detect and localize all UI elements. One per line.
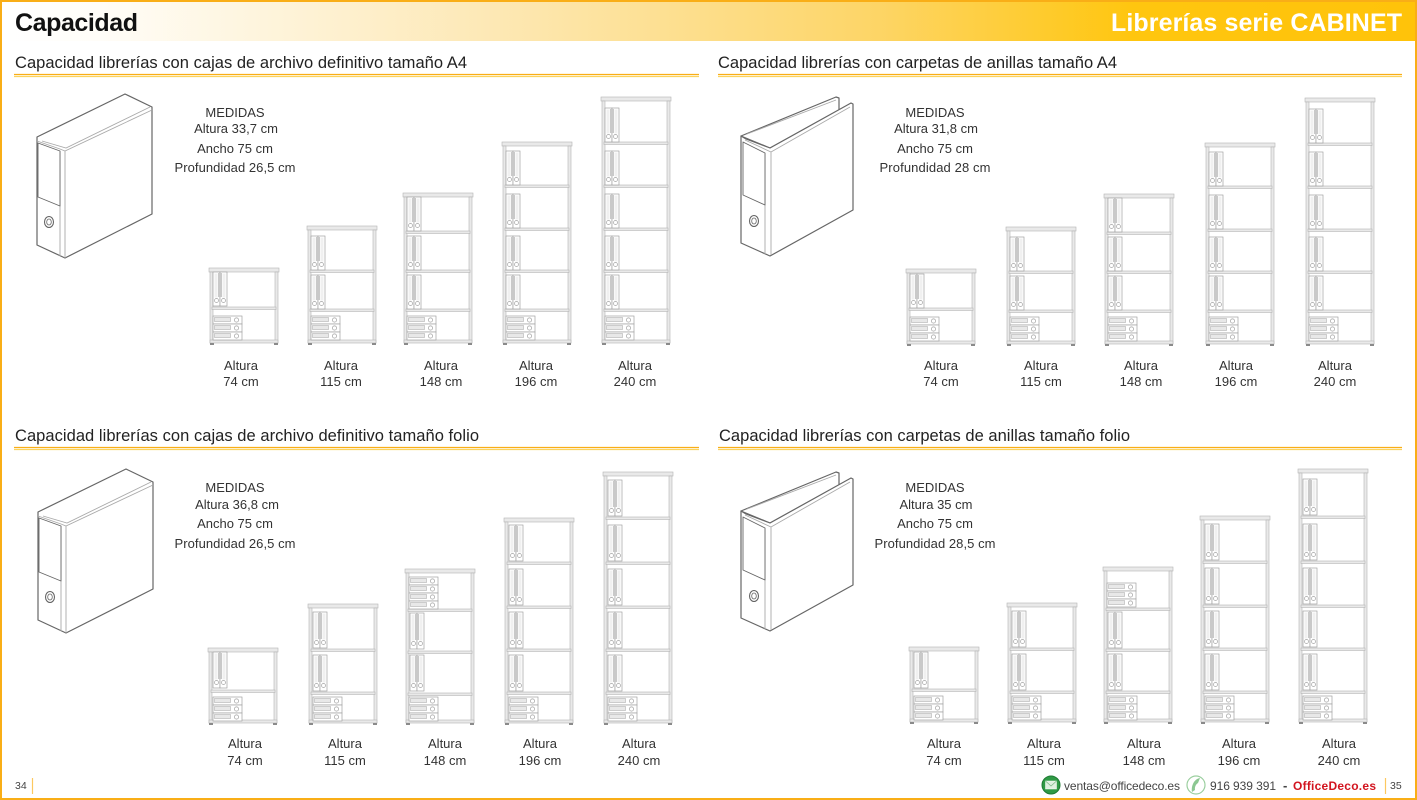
height labels: 74 cm [223,374,259,389]
measurements: Altura 35 cm [900,497,972,512]
height labels: 240 cm [614,374,656,389]
heading: boxes folio: Capacidad librerías con cajas de archivo definitivo tamaño folio [15,427,479,445]
bookcase 74 cm [208,648,278,725]
height labels: 115 cm [1020,374,1062,389]
height labels: Altura [618,358,653,373]
measurements: Ancho 75 cm [197,516,273,531]
phone number: 916 939 391 [1210,779,1276,793]
height labels: 115 cm [324,753,366,768]
panel: boxes A4 [14,54,699,389]
measurements [880,105,990,175]
height labels: 115 cm [320,374,362,389]
measurements [874,480,996,551]
bookcase 240 cm [601,97,671,345]
measurements: Profundidad 28 cm [880,160,990,175]
brand: OfficeDeco.es [1293,779,1376,793]
height labels: Altura [424,358,459,373]
bookcase 115 cm [1007,603,1077,724]
height labels: 148 cm [1123,753,1165,768]
height labels: 115 cm [1023,753,1065,768]
measurements: Profundidad 26,5 cm [174,160,296,175]
height labels: Altura [224,358,259,373]
height labels: Altura [328,736,363,751]
measurements: Altura 33,7 cm [194,121,278,136]
height labels: Altura [1024,358,1059,373]
footer: - [1283,778,1287,793]
measurements: MEDIDAS [205,480,265,495]
bookcase 196 cm [1205,143,1275,346]
height labels: 74 cm [926,753,962,768]
height labels: Altura [1124,358,1159,373]
bookcase 196 cm [1200,516,1270,724]
bookcase 148 cm [405,569,475,725]
height labels: Altura [1127,736,1162,751]
icon: phone [1187,776,1205,794]
panel: binders A4 [718,54,1402,389]
icon: archive box [38,469,153,633]
height labels: Altura [1219,358,1254,373]
bookcase 196 cm [504,518,574,725]
series title: Librerías serie CABINET [1111,9,1402,37]
icon: email [1042,776,1060,794]
left page number: 34 [15,780,27,792]
bookcase 148 cm [1103,567,1173,724]
height labels: 196 cm [1218,753,1260,768]
height labels: Altura [228,736,263,751]
bookcase 74 cm [906,269,976,346]
bookcase 148 cm [403,193,473,345]
height labels: 148 cm [420,374,462,389]
bookcase 74 cm [909,647,979,724]
footer [15,776,1402,794]
heading: binders A4: Capacidad librerías con carpetas de anillas tamaño A4 [718,54,1117,72]
measurements: Ancho 75 cm [897,141,973,156]
height labels [923,358,1356,389]
bookcase 74 cm [209,268,279,345]
measurements: MEDIDAS [905,480,965,495]
bookcase 196 cm [502,142,572,345]
bookcase 240 cm [1298,469,1368,724]
measurements [174,480,296,551]
measurements: MEDIDAS [905,105,965,120]
panel: boxes folio [14,427,699,768]
heading: binders folio: Capacidad librerías con carpetas de anillas tamaño folio [719,427,1130,445]
height labels: 148 cm [1120,374,1162,389]
right page number: 35 [1390,780,1402,792]
measurements: Ancho 75 cm [897,516,973,531]
email address: ventas@officedeco.es [1064,779,1180,793]
height labels: 240 cm [1314,374,1356,389]
bookcase 115 cm [1006,227,1076,346]
icon: archive box [37,94,152,258]
height labels: Altura [324,358,359,373]
measurements: Ancho 75 cm [197,141,273,156]
height labels: Altura [622,736,657,751]
measurements: Profundidad 28,5 cm [874,536,996,551]
height labels: Altura [924,358,959,373]
panel: binders folio [718,427,1402,768]
height labels: Altura [1322,736,1357,751]
bookcase 240 cm [603,472,673,725]
height labels [227,736,660,768]
measurements: MEDIDAS [205,105,265,120]
bookcase 240 cm [1305,98,1375,346]
height labels: Altura [1222,736,1257,751]
height labels: 74 cm [923,374,959,389]
height labels: Altura [1318,358,1353,373]
height labels: 240 cm [1318,753,1360,768]
icon: ring binder [741,97,853,256]
height labels [926,736,1360,768]
height labels: Altura [519,358,554,373]
heading: boxes A4: Capacidad librerías con cajas de archivo definitivo tamaño A4 [15,54,467,72]
header band [2,2,1415,41]
measurements: Profundidad 26,5 cm [174,536,296,551]
measurements [174,105,296,175]
bookcase 115 cm [308,604,378,725]
height labels: Altura [428,736,463,751]
height labels: Altura [1027,736,1062,751]
height labels: 74 cm [227,753,263,768]
height labels: 196 cm [515,374,557,389]
height labels [223,358,656,389]
height labels: 196 cm [1215,374,1257,389]
height labels: Altura [523,736,558,751]
measurements: Altura 31,8 cm [894,121,978,136]
measurements: Altura 36,8 cm [195,497,279,512]
height labels: 240 cm [618,753,660,768]
bookcase 148 cm [1104,194,1174,346]
height labels: 196 cm [519,753,561,768]
height labels: 148 cm [424,753,466,768]
height labels: Altura [927,736,962,751]
bookcase 115 cm [307,226,377,345]
title: Capacidad [15,9,138,37]
icon: ring binder [741,472,853,631]
